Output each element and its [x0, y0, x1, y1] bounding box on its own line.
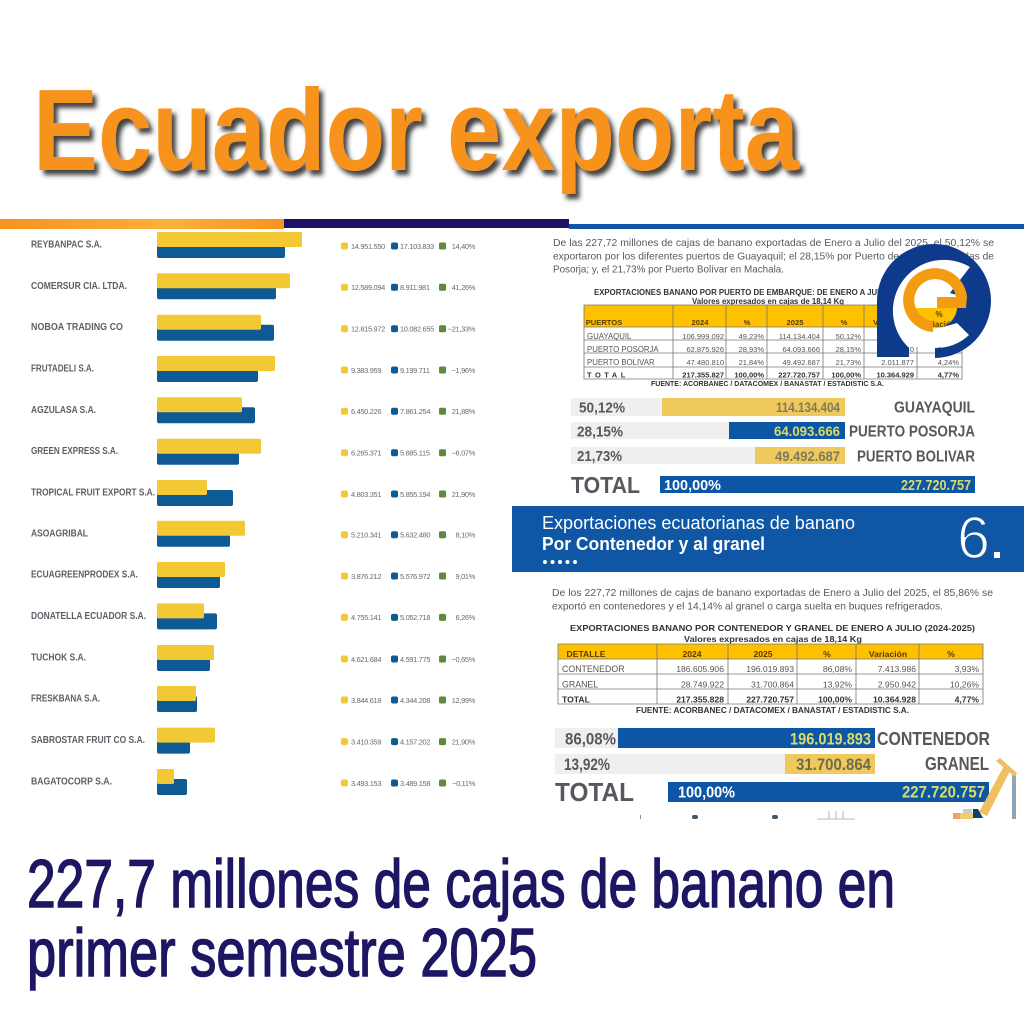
row: Bagatocorp: 3.493.153: [351, 779, 381, 788]
row: Comersur: COMERSUR CIA. LTDA.: [31, 281, 127, 292]
bar: Guayaquil: 50,12%: [579, 400, 625, 416]
logo: orange and blue e: %: [935, 310, 943, 319]
row: Tropical Fruit Export: 5.855.194: [400, 490, 430, 499]
row: Ecuagreenprodex: 9,01%: [456, 572, 476, 581]
row: Green Express: GREEN EXPRESS S.A.: [31, 446, 118, 457]
row: Donatella Ecuador: 6,26%: [456, 613, 476, 622]
row: Frutadeli: 9.199.711: [400, 366, 430, 375]
row: Tuchok: 4.621.684: [351, 655, 381, 664]
row: Comersur: 8.911.981: [400, 283, 430, 292]
row: Tropical Fruit Export: 4.803.351: [351, 490, 381, 499]
text block: ports summary: Posorja; y, el 21,73% por Puerto Bolívar en Machala.: [553, 264, 784, 276]
row: Tuchok: TUCHOK S.A.: [31, 652, 86, 664]
table: container vs bulk: Variación: [869, 649, 907, 659]
row: Freskbana: 12,99%: [452, 696, 476, 705]
bar: total: [555, 777, 989, 807]
bar: Puerto Bolivar: [571, 447, 975, 466]
bar: contenedor: [555, 728, 990, 749]
bar: total: TOTAL: [571, 472, 640, 498]
table: exports by port: 28,15%: [836, 345, 861, 354]
text block: ports summary: De las 227,72 millones de cajas de banano exportadas de Enero a Julio del 2025, el 50,12% se: [553, 237, 994, 249]
row: Agzulasa: 21,88%: [452, 407, 476, 416]
table: exports by port: 64.093.666: [782, 345, 820, 354]
row: Bagatocorp: [31, 769, 476, 795]
table: exports by port: 227.720.757: [778, 370, 820, 380]
bar: Puerto Posorja: 28,15%: [577, 424, 623, 440]
row: Ecuagreenprodex: 5.576.972: [400, 572, 430, 581]
bar: granel: 31.700.864: [796, 755, 871, 774]
table: exports by port: 21,73%: [836, 358, 861, 367]
table: exports by port: Variación: [873, 318, 907, 327]
text block: ports summary: exportaron por los diferentes puertos de Guayaquil; el 28,15% por Puerto de Aguas Profundas de: [553, 250, 994, 262]
table: exports by port: 1,94%: [938, 345, 959, 354]
row: Comersur: 41,26%: [452, 283, 476, 292]
table: container vs bulk: 86,08%: [823, 664, 852, 674]
row: Comersur: [31, 273, 476, 299]
chart: container share bars: [555, 728, 990, 807]
bar: granel: GRANEL: [925, 754, 989, 774]
row: Green Express: 6.265.371: [351, 449, 381, 458]
row: Sabrostar Fruit: SABROSTAR FRUIT CO S.A.: [31, 735, 145, 746]
row: Freskbana: FRESKBANA S.A.: [31, 694, 100, 704]
banner: section 6 heading: Por Contenedor y al granel: [542, 533, 765, 554]
table: container vs bulk: CONTENEDOR: [562, 664, 625, 674]
icon: port crane: [953, 758, 1017, 819]
logo: orange and blue e: Variación: [920, 320, 956, 329]
table: container vs bulk: 10.364.928: [873, 694, 916, 704]
row: Asoagribal: ASOAGRIBAL: [31, 528, 88, 539]
row: Donatella Ecuador: DONATELLA ECUADOR S.A.: [31, 611, 146, 622]
table: container vs bulk: 7.413.986: [878, 664, 916, 674]
table: exports by port: 10.364.929: [876, 370, 914, 380]
row: Sabrostar Fruit: [31, 728, 476, 754]
table: container vs bulk: GRANEL: [562, 680, 598, 690]
table: container vs bulk: 227.720.757: [746, 694, 794, 704]
row: Green Express: −6,07%: [452, 449, 476, 458]
row: Noboa: 12.815.972: [351, 325, 385, 334]
row: Frutadeli: [31, 356, 476, 382]
table: exports by port: FUENTE: ACORBANEC / DATACOMEX / BANASTAT / ESTADISTIC S.A.: [651, 381, 884, 388]
bar: Guayaquil: GUAYAQUIL: [894, 400, 975, 416]
row: Freskbana: [31, 686, 476, 712]
headline: [27, 846, 895, 991]
table: container vs bulk: 10,26%: [950, 680, 979, 690]
row: Tropical Fruit Export: [31, 480, 476, 506]
row: Freskbana: 4.344.208: [400, 696, 430, 705]
row: Donatella Ecuador: 5.052.718: [400, 613, 430, 622]
row: Sabrostar Fruit: 21,90%: [452, 737, 476, 746]
text block: container summary: exportó en contenedores y el 14,14% al granel o carga suelta en buques refrigerados.: [552, 600, 943, 612]
bar: total: 100,00%: [664, 477, 721, 494]
row: Asoagribal: 5.632.480: [400, 531, 430, 540]
row: Agzulasa: [31, 397, 476, 423]
table: exports by port: 47.480.810: [686, 358, 724, 367]
table: exports by port: 100,00%: [831, 370, 861, 380]
table: exports by port: 4,77%: [938, 370, 959, 380]
row: Ecuagreenprodex: [31, 562, 476, 588]
row: Donatella Ecuador: 4.755.141: [351, 613, 381, 622]
table: exports by port: PUERTO POSORJA: [587, 345, 659, 354]
row: Bagatocorp: −0,11%: [452, 779, 476, 788]
row: Agzulasa: 6.450.226: [351, 407, 381, 416]
table: container vs bulk: 2024: [682, 649, 702, 659]
table: container vs bulk: 13,92%: [823, 680, 852, 690]
row: Tuchok: −0,65%: [452, 655, 476, 664]
table: container vs bulk: 4,77%: [955, 694, 979, 704]
table: container vs bulk: 217.355.828: [676, 694, 724, 704]
table: exports by port: 100,00%: [734, 370, 764, 380]
bar: Guayaquil: [571, 398, 975, 416]
table: container vs bulk: TOTAL: [562, 694, 590, 704]
table: exports by port: 6,67%: [938, 332, 959, 341]
table: exports by port: 2.011.877: [881, 358, 914, 367]
bar: total: TOTAL: [555, 777, 634, 807]
title: exporta: [447, 65, 800, 195]
chart: port share bars: [571, 398, 975, 498]
table: exports by port: 2024: [692, 318, 709, 327]
row: Agzulasa: 7.861.254: [400, 407, 430, 416]
row: Reybanpac: 14,40%: [452, 242, 476, 251]
bar: Guayaquil: 114.134.404: [776, 399, 840, 415]
table: container vs bulk: [558, 623, 983, 715]
table: exports by port: TOTAL: [587, 370, 629, 380]
table: container vs bulk: 2.950.942: [878, 680, 916, 690]
bar: Puerto Posorja: PUERTO POSORJA: [849, 424, 975, 440]
table: exports by port: PUERTOS: [586, 318, 622, 327]
table: exports by port: 50,12%: [836, 332, 861, 341]
table: exports by port: 2025: [787, 318, 804, 327]
row: Bagatocorp: 3.489.158: [400, 779, 430, 788]
table: exports by port: 21,84%: [739, 358, 764, 367]
cropped icons at panel bottom edge: [640, 811, 855, 819]
headline: primer semestre 2025: [27, 915, 537, 991]
row: Tropical Fruit Export: 21,90%: [452, 490, 476, 499]
row: Noboa: NOBOA TRADING CO: [31, 322, 123, 333]
bar: Puerto Posorja: [571, 422, 975, 440]
row: Bagatocorp: BAGATOCORP S.A.: [31, 776, 112, 788]
table: container vs bulk: FUENTE: ACORBANEC / DATACOMEX / BANASTAT / ESTADISTIC S.A.: [636, 706, 909, 715]
row: Ecuagreenprodex: ECUAGREENPRODEX S.A.: [31, 570, 138, 580]
table: container vs bulk: 2025: [753, 649, 773, 659]
table: container vs bulk: 28.749.922: [681, 680, 724, 690]
row: Noboa: −21,33%: [448, 325, 476, 334]
row: Green Express: 5.885.115: [400, 449, 430, 458]
table: exports by port: %: [841, 318, 848, 327]
row: Asoagribal: 8,10%: [456, 531, 476, 540]
row: Noboa: [31, 315, 476, 341]
row: Asoagribal: 5.210.341: [351, 531, 381, 540]
table: exports by port: Valores expresados en cajas de 18,14 Kg: [692, 297, 844, 306]
row: Tuchok: [31, 645, 476, 671]
panel: ranking of exporting companies: [31, 232, 476, 795]
row: Tropical Fruit Export: TROPICAL FRUIT EXPORT S.A.: [31, 488, 155, 498]
row: Donatella Ecuador: [31, 603, 476, 629]
row: Ecuagreenprodex: 3.876.212: [351, 572, 381, 581]
bar: total: [571, 472, 975, 498]
table: exports by port: 106.999.092: [682, 332, 724, 341]
table: container vs bulk: 31.700.864: [751, 680, 794, 690]
table: container vs bulk: DETALLE: [566, 649, 606, 659]
bar: granel: 13,92%: [564, 756, 610, 774]
row: Reybanpac: 17.103.833: [400, 242, 434, 251]
table: container vs bulk: %: [823, 649, 831, 659]
row: Sabrostar Fruit: 3.410.359: [351, 737, 381, 746]
row: Reybanpac: REYBANPAC S.A.: [31, 240, 102, 250]
table: exports by port: 7.135.312: [881, 332, 914, 341]
row: Agzulasa: AGZULASA S.A.: [31, 405, 96, 416]
banner: section 6 heading: [512, 505, 1024, 572]
table: exports by port: EXPORTACIONES BANANO POR PUERTO DE EMBARQUE: DE ENERO A JULIO (2024 – 2025): [594, 288, 941, 297]
bar: granel: [555, 754, 989, 774]
row: Frutadeli: −1,96%: [452, 366, 476, 375]
table: exports by port: 62.875.926: [686, 345, 724, 354]
table: container vs bulk: 196.019.893: [746, 664, 794, 674]
row: Asoagribal: [31, 521, 476, 547]
title: Ecuador: [33, 65, 423, 195]
text block: ports summary: [553, 237, 994, 276]
table: exports by port: 1.217.740: [881, 345, 914, 354]
table: exports by port: 217.355.827: [682, 370, 724, 380]
table: exports by port: 49,23%: [739, 332, 764, 341]
title: [33, 65, 800, 195]
logo: orange and blue e: [877, 244, 991, 358]
tricolor divider bar: [0, 219, 1024, 229]
row: Frutadeli: 9.383.959: [351, 366, 381, 375]
banner: section 6 heading: 6: [957, 505, 990, 571]
table: exports by port: 114.134.404: [779, 332, 820, 341]
row: Comersur: 12.589.094: [351, 283, 385, 292]
row: Sabrostar Fruit: 4.157.202: [400, 737, 430, 746]
banner: section 6 heading: Exportaciones ecuatorianas de banano: [542, 512, 855, 533]
row: Freskbana: 3.844.618: [351, 696, 381, 705]
row: Frutadeli: FRUTADELI S.A.: [31, 364, 94, 374]
row: Green Express: [31, 439, 476, 465]
table: container vs bulk: %: [947, 649, 955, 659]
table: container vs bulk: 3,93%: [955, 664, 979, 674]
bar: contenedor: 196.019.893: [790, 730, 871, 748]
bar: contenedor: 86,08%: [565, 730, 616, 748]
row: Noboa: 10.082.655: [400, 325, 434, 334]
bar: contenedor: CONTENEDOR: [877, 729, 990, 749]
table: exports by port: GUAYAQUIL: [587, 332, 632, 341]
bar: Puerto Bolivar: 49.492.687: [775, 448, 840, 464]
text block: container summary: [552, 587, 993, 612]
row: Tuchok: 4.591.775: [400, 655, 430, 664]
table: exports by port: PUERTO BOLIVAR: [587, 358, 655, 367]
bar: total: 100,00%: [678, 784, 735, 802]
table: exports by port: 49.492.687: [782, 358, 820, 367]
table: exports by port: 4,24%: [938, 358, 959, 367]
bar: total: 227.720.757: [901, 478, 971, 494]
table: container vs bulk: 100,00%: [818, 694, 852, 704]
bar: Puerto Posorja: 64.093.666: [774, 423, 840, 439]
row: Reybanpac: 14.951.550: [351, 242, 385, 251]
table: exports by port: %: [744, 318, 751, 327]
bar: total: 227.720.757: [902, 784, 985, 802]
bar: Puerto Bolivar: PUERTO BOLIVAR: [857, 448, 975, 466]
table: container vs bulk: EXPORTACIONES BANANO POR CONTENEDOR Y GRANEL DE ENERO A JULIO (2024-2025): [570, 623, 975, 633]
table: container vs bulk: 186.605.906: [676, 664, 724, 674]
table: exports by port: 28,93%: [739, 345, 764, 354]
table: exports by port: [584, 288, 962, 388]
row: Reybanpac: [31, 232, 476, 258]
bar: Puerto Bolivar: 21,73%: [577, 448, 622, 465]
table: container vs bulk: Valores expresados en cajas de 18,14 Kg: [684, 634, 862, 644]
text block: container summary: De los 227,72 millones de cajas de banano exportadas de Enero a Julio del 2025, el 85,86% se: [552, 587, 993, 599]
